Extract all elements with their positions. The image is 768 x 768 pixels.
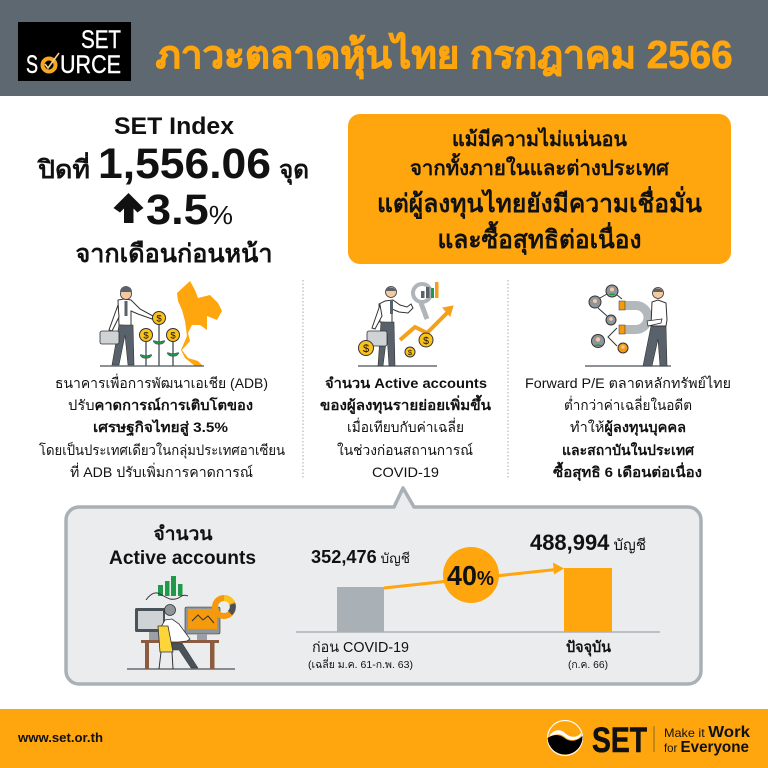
text: forward PE: และสถาบันในประเทศ [562,441,695,458]
callout: orange message panel [348,114,731,264]
text: ADB forecast: เศรษฐกิจไทยสู่ 3.5% [93,418,229,437]
text: active accounts rising: เมื่อเทียบกับค่าเฉลี่ย [347,418,464,435]
icon: up arrow [114,193,144,223]
SET Index summary: SET Index [114,113,235,140]
icon: businessman with magnifier and rising arrow: $ [408,348,413,357]
text: ADB forecast: ที่ ADB ปรับเพิ่มการคาดการณ์ [70,463,253,480]
panel heading: Active accounts [109,548,256,569]
bar chart [296,530,660,671]
text: active accounts rising: ของผู้ลงทุนรายย่อยเพิ่มขึ้น [320,394,491,414]
panel heading [109,524,256,569]
arrow: growth [384,562,564,588]
label: current: (ก.ค. 66) [568,659,608,671]
label: 352,476 accounts: 352,476 บัญชี [311,547,410,567]
SET Index summary: ปิดที่ [36,152,90,184]
logo: SET Source: URCE [60,51,121,79]
text: ADB forecast [39,374,285,480]
callout: orange message panel: จากทั้งภายในและต่างประเทศ [410,152,670,180]
SET Index summary: 1,556.06 [98,140,271,188]
title: ภาวะตลาดหุ้นไทย กรกฎาคม 2566 [156,32,732,79]
website: www.set.or.th [17,730,103,745]
text: forward PE: ต่ำกว่าค่าเฉลี่ยในอดีต [564,396,692,413]
header band [0,0,768,96]
icon: businessman with magnifier and rising arrow: $ [423,335,429,347]
icon: businessman growing coins with Thailand map: $ [156,314,162,324]
text: active accounts rising: จำนวน Active accounts [325,375,487,391]
panel heading: จำนวน [154,524,213,545]
badge: 40% [443,547,499,603]
icon: businessman with magnifier and rising arrow: $ [363,343,369,355]
callout: orange message panel: แต่ผู้ลงทุนไทยยังมีความเชื่อมั่น [377,186,702,220]
logo: SET Source: S [26,51,38,79]
logo: SET: Make it Work [664,724,750,741]
SET Index summary [36,113,309,268]
icon: businessman growing coins with Thailand map [100,281,222,366]
text: ADB forecast: โดยเป็นประเทศเดียวในกลุ่มประเทศอาเซียน [39,441,285,459]
label: 488,994 accounts: 488,994 บัญชี [530,530,646,555]
SET Index summary: จุด [279,156,309,186]
text: ADB forecast: ปรับคาดการณ์การเติบโตของ [68,396,253,413]
dividers [302,280,304,478]
logo: SET [548,720,750,760]
label: before covid [308,640,413,671]
icon: businessman growing coins with Thailand map: $ [143,330,149,342]
label: before covid: (เฉลี่ย ม.ค. 61-ก.พ. 63) [308,657,413,671]
label: current: ปัจจุบัน [566,639,612,657]
panel: active accounts [66,488,701,684]
text: forward PE: ซื้อสุทธิ 6 เดือนต่อเนื่อง [553,461,702,481]
icon: businessman growing coins with Thailand map: $ [170,330,176,342]
text: forward PE [525,375,731,481]
bar: before COVID-19 [337,587,384,632]
icon: man with magnet attracting investors [585,285,671,366]
text: active accounts rising [320,375,491,480]
SET Index summary: จากเดือนก่อนหน้า [76,240,272,268]
icon: analyst at desk [127,576,235,669]
badge: 40%: 40% [447,560,494,591]
text: active accounts rising: COVID-19 [372,464,439,480]
logo: SET: SET [592,721,647,760]
callout: orange message panel: และซื้อสุทธิต่อเนื่อง [438,220,642,256]
logo: SET: for Everyone [664,739,749,756]
logo: SET Source: SET [81,26,121,54]
label: current [566,639,612,671]
label: before covid: ก่อน COVID-19 [312,640,409,656]
SET Index summary: 3.5% [146,186,233,234]
text: ADB forecast: ธนาคารเพื่อการพัฒนาเอเชีย (ADB) [55,374,268,391]
bar: current [564,568,612,632]
logo: SET Source [18,22,131,81]
callout: orange message panel: แม้มีความไม่แน่นอน [452,127,627,151]
text: forward PE: Forward P/E ตลาดหลักทรัพย์ไทย [525,375,731,391]
text: forward PE: ทำให้ผู้ลงทุนบุคคล [570,419,686,436]
text: active accounts rising: ในช่วงก่อนสถานการณ์ [337,442,473,458]
footer band [0,709,768,768]
icon: businessman with magnifier and rising arrow [358,282,453,366]
